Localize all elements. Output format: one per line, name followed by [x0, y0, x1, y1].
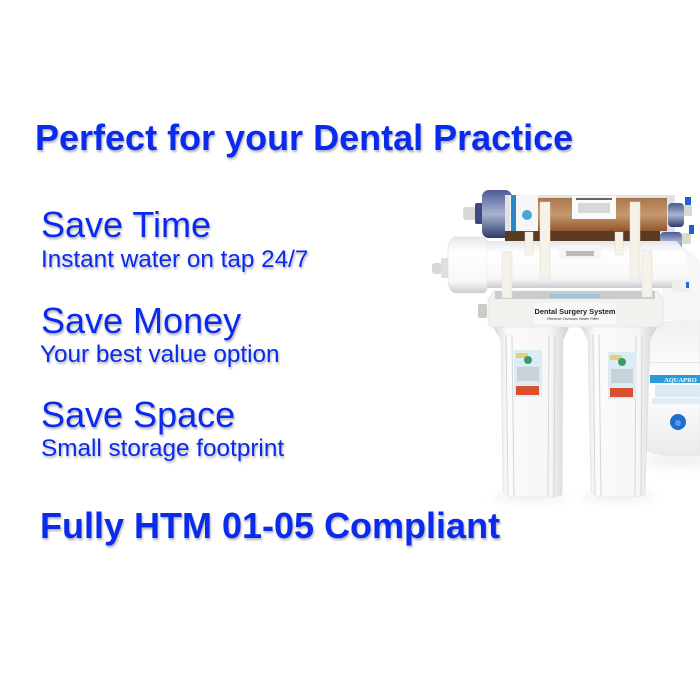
- white membrane housing: [432, 237, 690, 293]
- text: Instant water on tap 24/7: Instant water on tap 24/7: [41, 246, 308, 273]
- heading: Save Time: Save Time: [41, 204, 211, 245]
- right filter housing: [580, 325, 658, 497]
- label: Dental Surgery System: Dental Surgery System: [535, 307, 616, 316]
- top clear cartridge with brown resin: [463, 190, 694, 252]
- heading: Save Money: Save Money: [41, 300, 241, 341]
- storage tank: AQUAPRO: [664, 377, 697, 384]
- mounting plate with label: [478, 291, 663, 327]
- label: Reverse Osmosis Water Filter: Reverse Osmosis Water Filter: [547, 316, 600, 321]
- white mounting clips: [502, 202, 652, 298]
- floor shadow: [492, 454, 700, 501]
- heading: Save Space: Save Space: [41, 394, 235, 435]
- text: Your best value option: Your best value option: [40, 341, 280, 368]
- storage tank: [647, 243, 700, 456]
- footer claim: Fully HTM 01-05 Compliant: [40, 505, 500, 546]
- left filter housing: [492, 325, 570, 497]
- title: Perfect for your Dental Practice: [35, 117, 573, 158]
- text: Small storage footprint: Small storage footprint: [41, 435, 284, 462]
